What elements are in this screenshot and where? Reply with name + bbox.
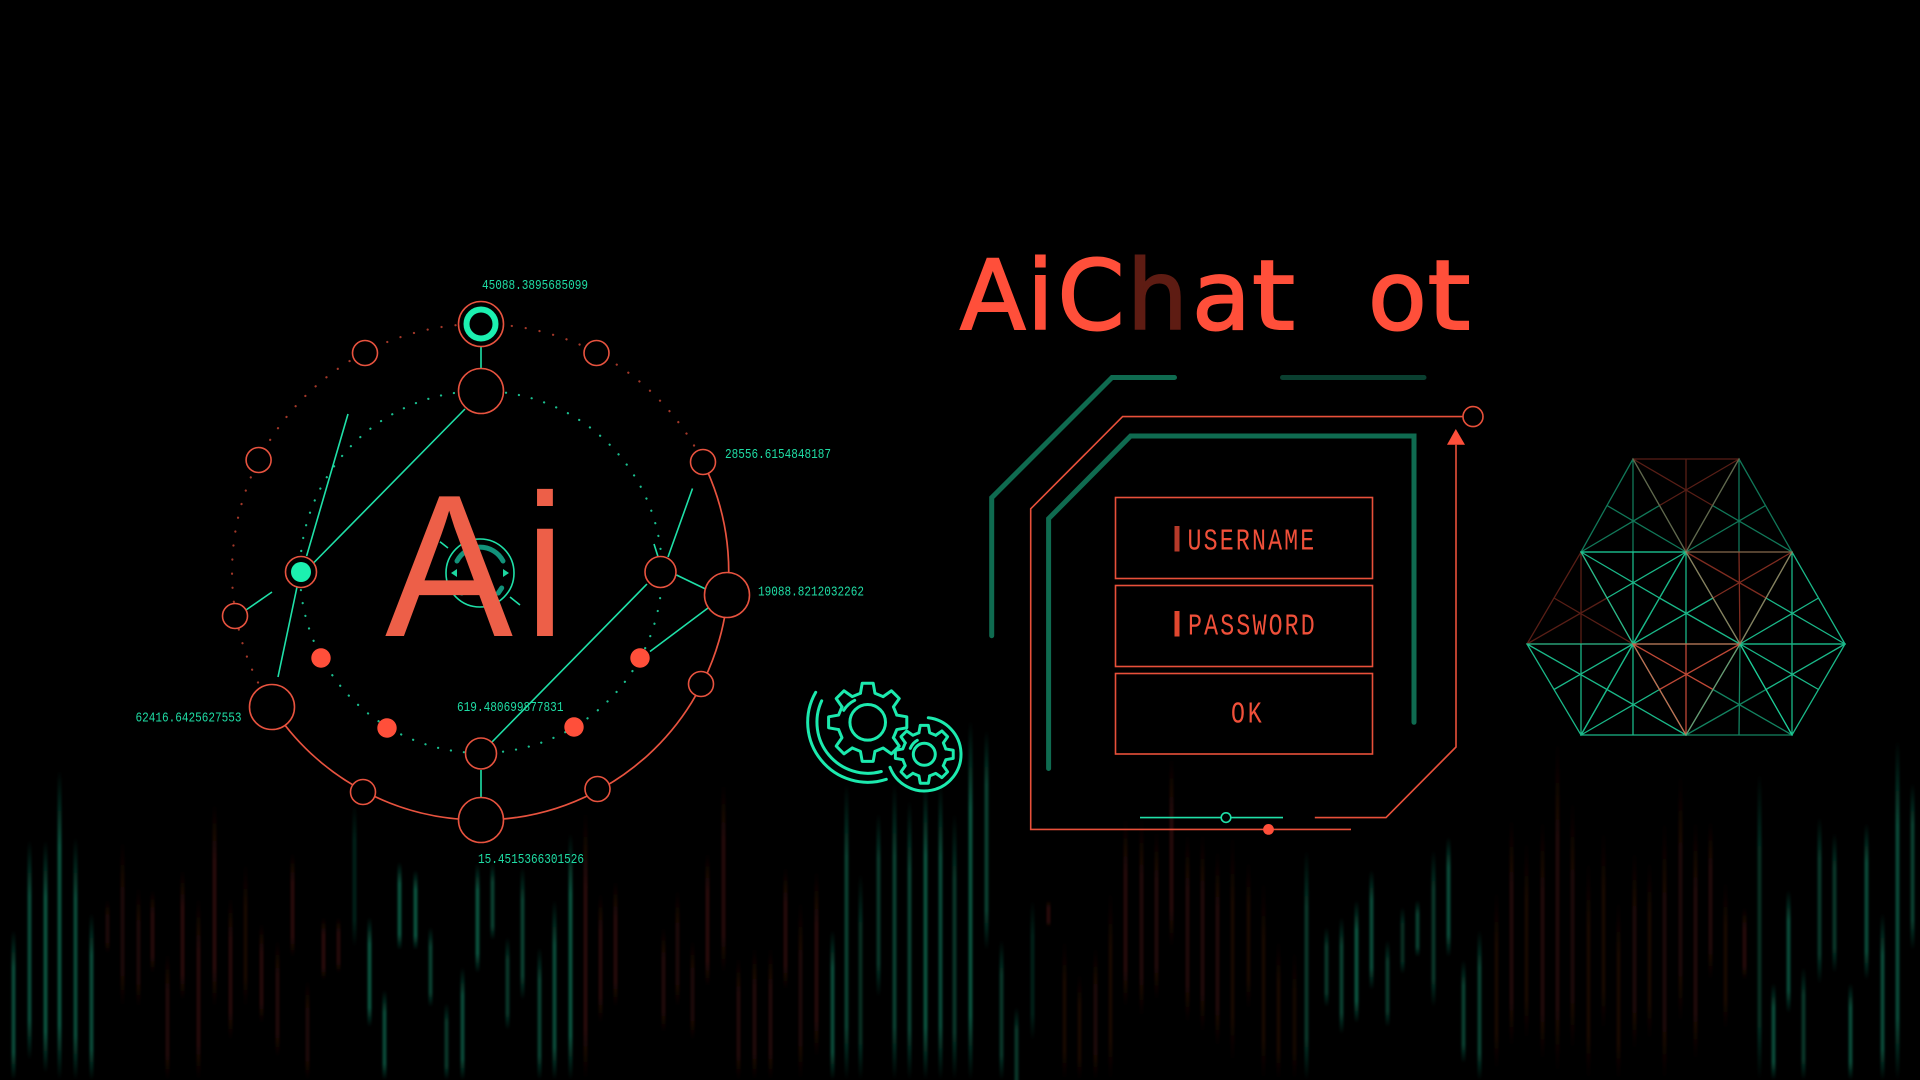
highlighted green nodes bbox=[291, 310, 496, 582]
value labels: 45088.3895685099 bbox=[482, 279, 588, 294]
value labels: 19088.8212032262 bbox=[758, 586, 864, 600]
title: a bbox=[1192, 240, 1251, 352]
red dots bbox=[311, 648, 650, 738]
ok button bbox=[1116, 674, 1372, 754]
username field: USERNAME bbox=[1188, 525, 1314, 560]
value labels: 15.4515366301526 bbox=[478, 853, 584, 868]
red frame lines bbox=[1031, 407, 1483, 829]
title: A bbox=[960, 240, 1026, 352]
inner dotted ring bbox=[300, 391, 662, 753]
title: C bbox=[1058, 240, 1125, 352]
inner nodes bbox=[286, 368, 676, 769]
value labels: 619.480699877831 bbox=[457, 701, 564, 716]
big Ai letters: A bbox=[385, 453, 513, 680]
outer nodes bbox=[222, 302, 750, 842]
title: o bbox=[1368, 240, 1427, 352]
login panel bbox=[992, 378, 1483, 835]
slider track green bbox=[1140, 813, 1283, 822]
triangular mesh bbox=[1527, 459, 1845, 735]
connector lines bbox=[246, 347, 708, 797]
username field bbox=[1116, 498, 1372, 578]
outer solid ring segment bbox=[272, 462, 729, 820]
title bbox=[960, 240, 1470, 352]
title: t bbox=[1428, 240, 1470, 352]
value labels bbox=[136, 279, 864, 868]
center scanner icon bbox=[440, 539, 520, 607]
big Ai letters: i bbox=[525, 453, 565, 680]
small gear bbox=[890, 718, 961, 791]
password field: PASSWORD bbox=[1188, 610, 1315, 645]
arrow head bbox=[1447, 429, 1465, 445]
radial AI network diagram bbox=[136, 279, 864, 868]
password field bbox=[1116, 586, 1372, 666]
ok button: OK bbox=[1231, 698, 1262, 733]
background: equalizer bars bbox=[12, 720, 1914, 1080]
title: h bbox=[1127, 240, 1188, 352]
title: i bbox=[1027, 240, 1054, 352]
slider dot red bbox=[1263, 824, 1274, 835]
icon: gears bbox=[808, 683, 961, 791]
outer dotted ring segment bbox=[232, 324, 703, 707]
title: t bbox=[1252, 240, 1295, 352]
value labels: 62416.6425627553 bbox=[136, 712, 242, 726]
value labels: 28556.6154848187 bbox=[725, 448, 831, 463]
green frame lines bbox=[992, 378, 1424, 768]
large gear bbox=[808, 683, 907, 782]
